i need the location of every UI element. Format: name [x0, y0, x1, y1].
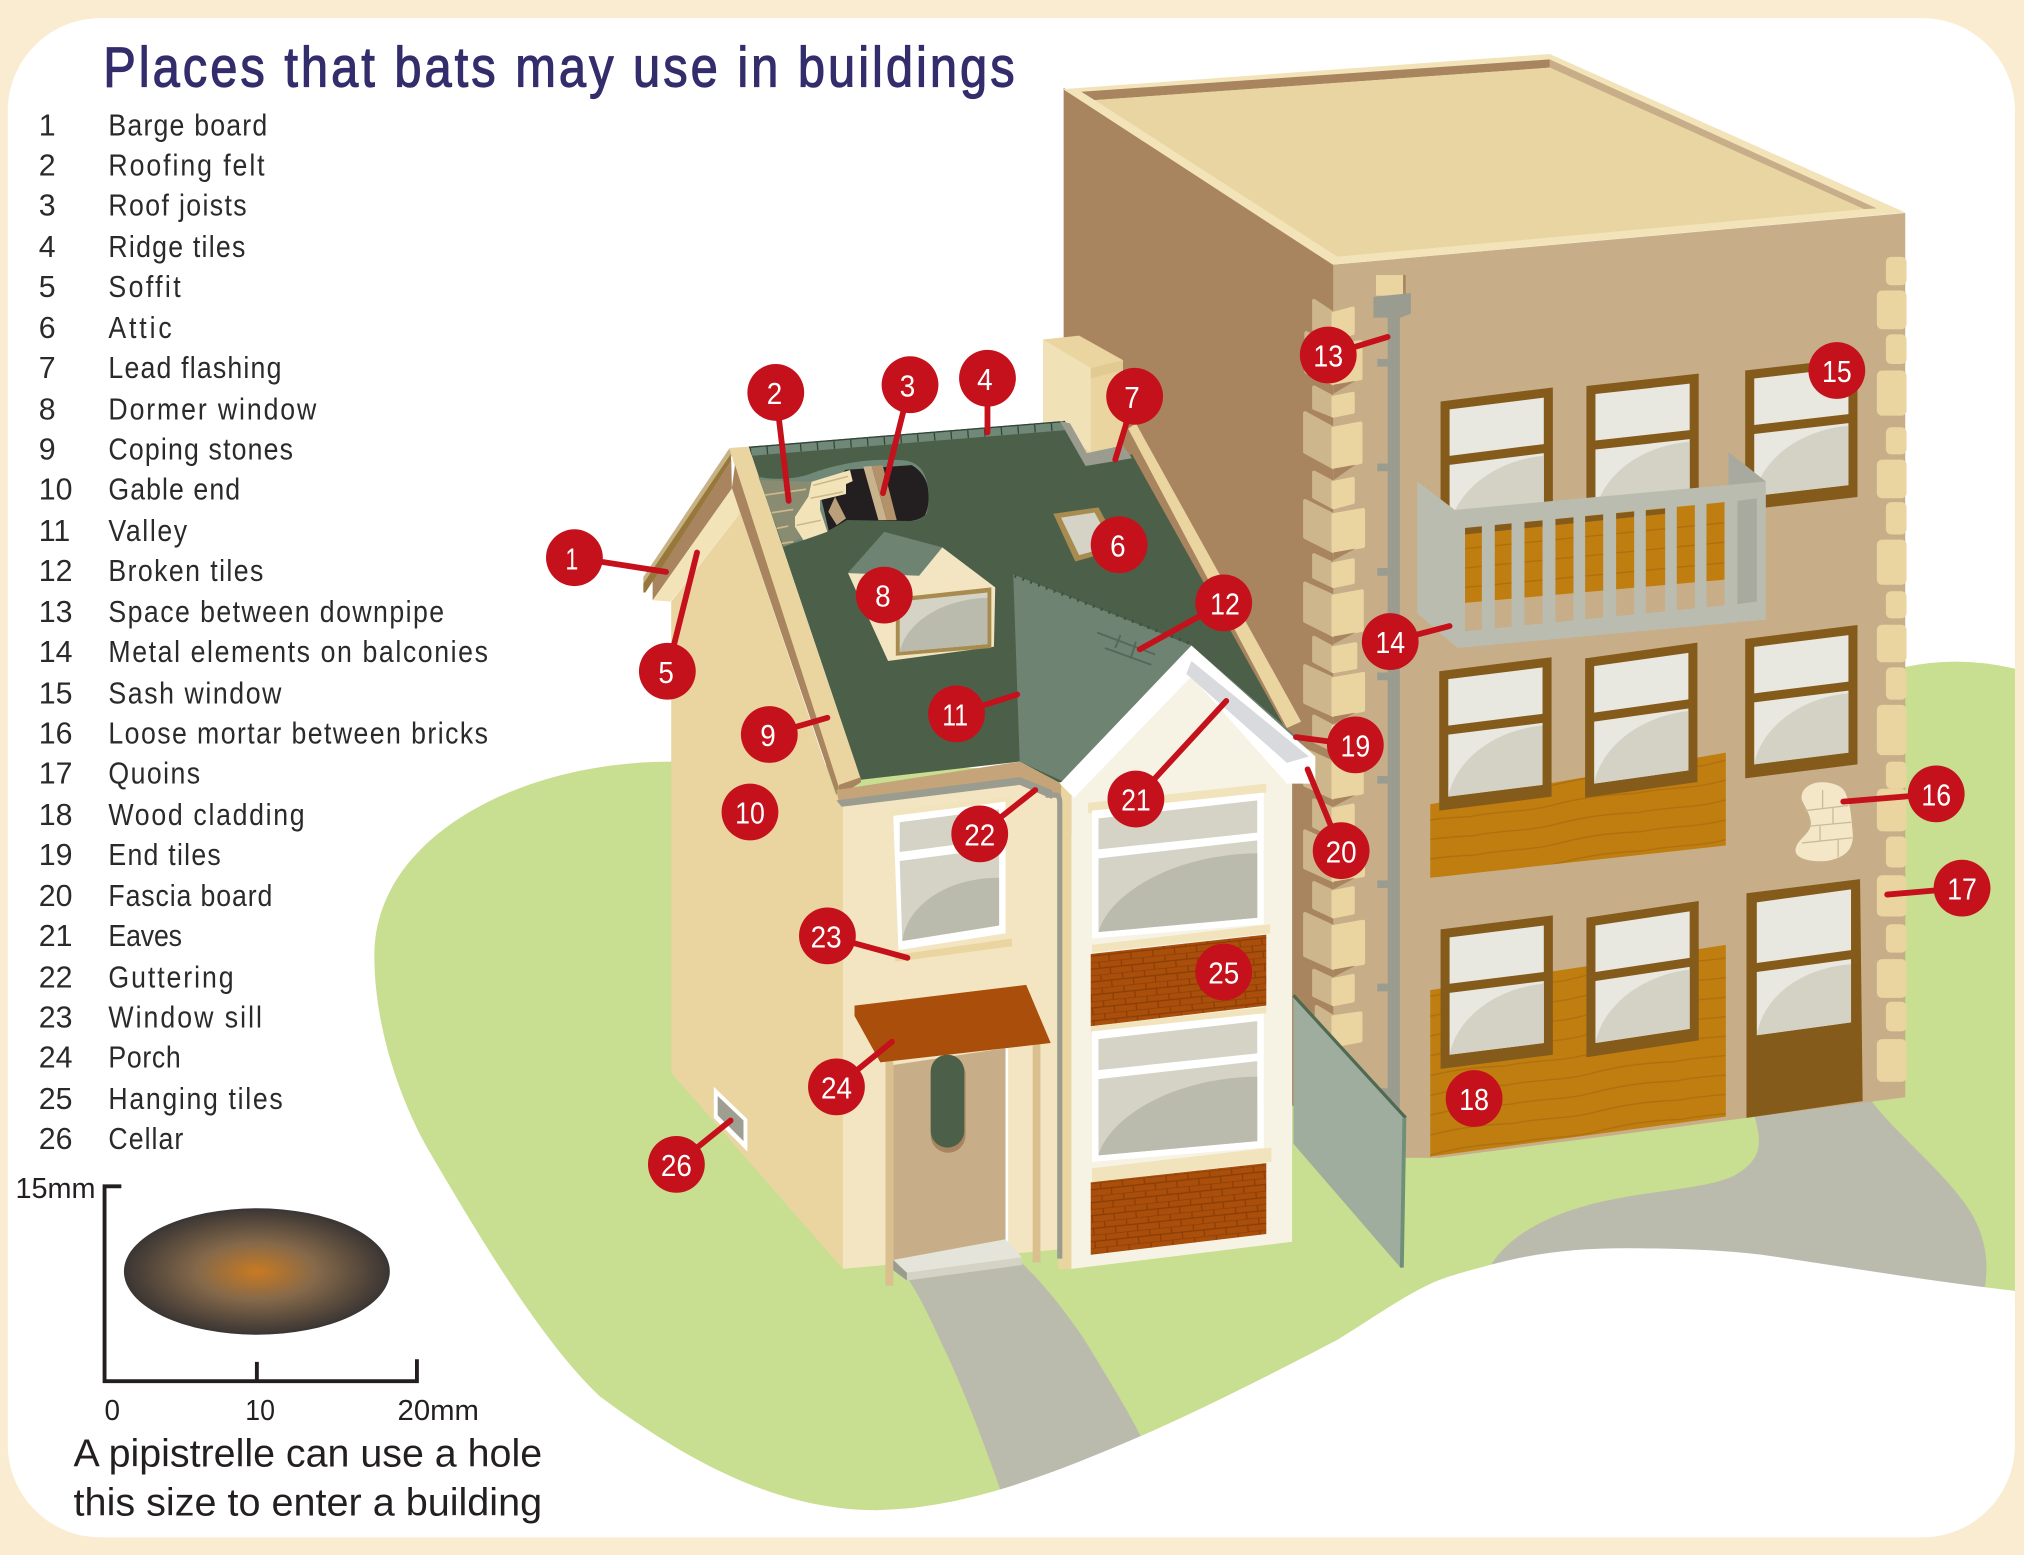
- legend numbers: 22: [39, 962, 72, 995]
- marker 14: [1362, 613, 1450, 670]
- marker 10: [722, 784, 778, 840]
- marker 8: 8: [875, 579, 891, 614]
- marker 22: [951, 790, 1035, 862]
- fascia board: [1186, 661, 1309, 763]
- legend numbers: 17: [39, 758, 72, 791]
- left coping stones: [729, 447, 861, 796]
- bat entry hole: [124, 1208, 390, 1335]
- cellar vent: [714, 1087, 747, 1151]
- marker 15: [1808, 342, 1865, 399]
- marker 12: [1140, 574, 1252, 649]
- door step: [893, 1239, 1022, 1281]
- legend labels: Guttering: [108, 961, 234, 995]
- legend labels: Soffit: [108, 270, 181, 304]
- legend labels: Fascia board: [108, 880, 272, 914]
- lawn: [374, 662, 2015, 1510]
- lead flashing: [1060, 421, 1132, 466]
- legend numbers: 7: [39, 352, 56, 385]
- legend numbers: 1: [39, 110, 56, 143]
- legend numbers: 25: [39, 1083, 72, 1116]
- marker 2: 2: [767, 376, 782, 411]
- legend numbers: 19: [39, 839, 72, 872]
- legend labels: Valley: [108, 514, 188, 548]
- marker 12: 12: [1210, 586, 1240, 621]
- upper bay window: [1088, 784, 1266, 938]
- roof joists: [795, 470, 853, 540]
- legend list: [39, 109, 488, 1156]
- marker 23: [799, 907, 907, 964]
- legend labels: Ridge tiles: [108, 230, 245, 264]
- marker 1: 1: [565, 541, 578, 576]
- quoins: corner: [1305, 301, 1363, 1046]
- legend numbers: 20: [39, 880, 72, 913]
- lower bay window: [1092, 1013, 1264, 1162]
- legend labels: Sash window: [108, 677, 282, 711]
- hanging tiles: lower: [1091, 1163, 1266, 1255]
- front downpipe: [1046, 795, 1060, 1259]
- legend numbers: 5: [39, 271, 56, 304]
- marker 24: 24: [821, 1071, 852, 1106]
- legend labels: Hanging tiles: [108, 1082, 283, 1116]
- legend numbers: 12: [39, 555, 72, 588]
- marker 5: [639, 553, 697, 700]
- marker 14: 14: [1375, 625, 1405, 660]
- attic interior: [821, 465, 929, 531]
- porch roof: [855, 985, 1051, 1062]
- dormer window: [848, 532, 995, 661]
- axis labels: 20mm: [398, 1395, 479, 1427]
- large building: [1063, 54, 1906, 1158]
- marker 22: 22: [964, 818, 995, 853]
- legend labels: Roofing felt: [108, 149, 265, 183]
- sash windows bottom row: [1441, 901, 1699, 1069]
- marker 8: [856, 567, 913, 624]
- marker 2: [747, 364, 804, 501]
- marker 19: 19: [1341, 728, 1370, 763]
- legend labels: Metal elements on balconies: [108, 636, 488, 670]
- legend numbers: 24: [39, 1042, 72, 1075]
- door with glazed panels: [1746, 879, 1863, 1118]
- marker 26: [648, 1120, 731, 1193]
- caption: this size to enter a building: [74, 1481, 542, 1524]
- caption: [74, 1432, 542, 1524]
- legend labels: Coping stones: [108, 433, 293, 467]
- marker 9: [741, 706, 827, 763]
- marker 16: [1843, 765, 1965, 822]
- scale axes: [105, 1186, 417, 1381]
- legend labels: Dormer window: [108, 393, 317, 427]
- loose mortar patch: [1796, 782, 1853, 861]
- marker 6: 6: [1110, 528, 1126, 563]
- marker 19: [1296, 716, 1384, 773]
- legend labels: Eaves: [108, 920, 182, 954]
- marker 1: [546, 529, 666, 586]
- legend numbers: 11: [39, 515, 70, 548]
- legend numbers: 21: [39, 920, 72, 953]
- marker 24: [808, 1042, 892, 1115]
- marker 17: 17: [1947, 872, 1977, 907]
- broken tiles: [1097, 633, 1155, 665]
- legend numbers: 3: [39, 190, 56, 223]
- bay sill: [1092, 924, 1270, 953]
- balcony: [1417, 452, 1766, 648]
- building side wall: [1064, 88, 1333, 1155]
- legend numbers: 16: [39, 718, 72, 751]
- barge board: [643, 448, 732, 600]
- legend numbers: 26: [39, 1123, 72, 1156]
- marker 7: 7: [1124, 380, 1140, 415]
- legend labels: Wood cladding: [108, 798, 305, 832]
- legend labels: End tiles: [108, 838, 221, 872]
- marker 13: 13: [1313, 339, 1343, 374]
- ridge tiles: [749, 421, 1069, 456]
- marker 10: 10: [735, 796, 765, 831]
- legend labels: Loose mortar between bricks: [108, 717, 488, 751]
- axis labels: [15, 1173, 479, 1427]
- marker 15: 15: [1822, 354, 1852, 389]
- roof hole rim: [758, 460, 929, 547]
- small house: [643, 336, 1315, 1286]
- porch pillars: [886, 1043, 1040, 1286]
- right coping stones: [1128, 423, 1301, 728]
- marker 4: 4: [977, 362, 993, 397]
- legend numbers: 15: [39, 678, 72, 711]
- garden wall: [1293, 995, 1406, 1268]
- legend labels: Broken tiles: [108, 554, 263, 588]
- legend labels: Gable end: [108, 473, 240, 507]
- marker 26: 26: [661, 1148, 692, 1183]
- legend numbers: 13: [39, 596, 72, 629]
- legend numbers: [39, 110, 72, 1156]
- wood cladding: upper: [1430, 753, 1726, 878]
- marker 7: [1106, 368, 1163, 460]
- soffit: [653, 488, 740, 602]
- legend labels: Roof joists: [108, 189, 247, 223]
- gable end wall: [671, 488, 843, 1269]
- marker 20: 20: [1326, 834, 1357, 869]
- axis labels: 0: [105, 1395, 120, 1427]
- white hill foreground: [878, 1248, 2015, 1523]
- valley roof: [1013, 574, 1314, 782]
- legend numbers: 23: [39, 1002, 72, 1035]
- legend labels: Porch: [108, 1041, 181, 1075]
- marker 18: [1446, 1070, 1503, 1127]
- legend numbers: 18: [39, 799, 72, 832]
- front wall: [843, 775, 1058, 1269]
- marker 25: [1195, 944, 1252, 1000]
- legend labels: Quoins: [108, 757, 200, 791]
- marker 9: 9: [760, 718, 776, 753]
- eaves and guttering: [836, 762, 1061, 807]
- legend numbers: 2: [39, 150, 56, 183]
- marker 21: [1108, 701, 1226, 827]
- marker 5: 5: [658, 655, 674, 690]
- marker 13: [1300, 327, 1388, 383]
- marker 21: 21: [1121, 783, 1151, 818]
- axis labels: 10: [245, 1395, 275, 1427]
- downpipe: [1373, 275, 1411, 1122]
- chimney: [1043, 336, 1123, 454]
- marker 23: 23: [811, 920, 842, 955]
- legend numbers: 4: [39, 231, 56, 264]
- sash windows middle row: [1439, 625, 1857, 811]
- legend labels: Barge board: [108, 109, 267, 143]
- legend numbers: 14: [39, 636, 72, 669]
- marker 17: [1887, 860, 1990, 917]
- building front wall: [1333, 213, 1905, 1158]
- marker 11: [928, 685, 1017, 742]
- legend labels: Window sill: [108, 1001, 262, 1035]
- marker 3: 3: [900, 368, 915, 403]
- marker 4: [959, 350, 1016, 432]
- marker 20: [1308, 769, 1370, 879]
- roof hole: [758, 460, 929, 547]
- garden path: right: [1484, 1101, 1986, 1297]
- barge board and soffit: [643, 448, 740, 602]
- hanging tiles: upper: [1091, 935, 1266, 1026]
- roofing felt: [760, 480, 812, 547]
- legend labels: Space between downpipe: [108, 596, 444, 630]
- lower bay sill: [1092, 1148, 1271, 1182]
- marker 16: 16: [1921, 778, 1951, 813]
- end tiles gable edge: [1060, 645, 1315, 798]
- legend numbers: 9: [39, 434, 56, 467]
- marker 25: 25: [1208, 956, 1239, 991]
- marker 3: [882, 356, 938, 493]
- bay wall: [1071, 665, 1292, 1269]
- legend numbers: 10: [39, 474, 72, 507]
- marker 11: 11: [942, 697, 968, 732]
- window sill: [893, 938, 1012, 962]
- garden path: front: [907, 1262, 1144, 1497]
- caption: A pipistrelle can use a hole: [74, 1432, 542, 1475]
- flat roof: [1063, 54, 1906, 265]
- legend labels: Lead flashing: [108, 352, 281, 386]
- legend labels: Cellar: [108, 1122, 184, 1156]
- main roof: [749, 421, 1291, 782]
- sash windows top row: [1441, 358, 1857, 541]
- upper front window: [891, 796, 1011, 950]
- title: Places that bats may use in buildings: [103, 36, 1015, 99]
- legend numbers: 8: [39, 394, 56, 427]
- hole size scale diagram: [15, 1173, 479, 1427]
- cream band: [1091, 1007, 1266, 1033]
- wood cladding: lower: [1430, 945, 1726, 1157]
- legend labels: [108, 109, 488, 1156]
- quoins: right edge: [1878, 258, 1905, 1080]
- marker 18: 18: [1459, 1082, 1489, 1117]
- legend numbers: 6: [39, 312, 56, 345]
- legend labels: Attic: [108, 312, 172, 346]
- door: [893, 1048, 1008, 1265]
- attic skylight: [1053, 507, 1120, 562]
- marker 6: [1091, 516, 1148, 573]
- axis labels: 15mm: [15, 1173, 96, 1205]
